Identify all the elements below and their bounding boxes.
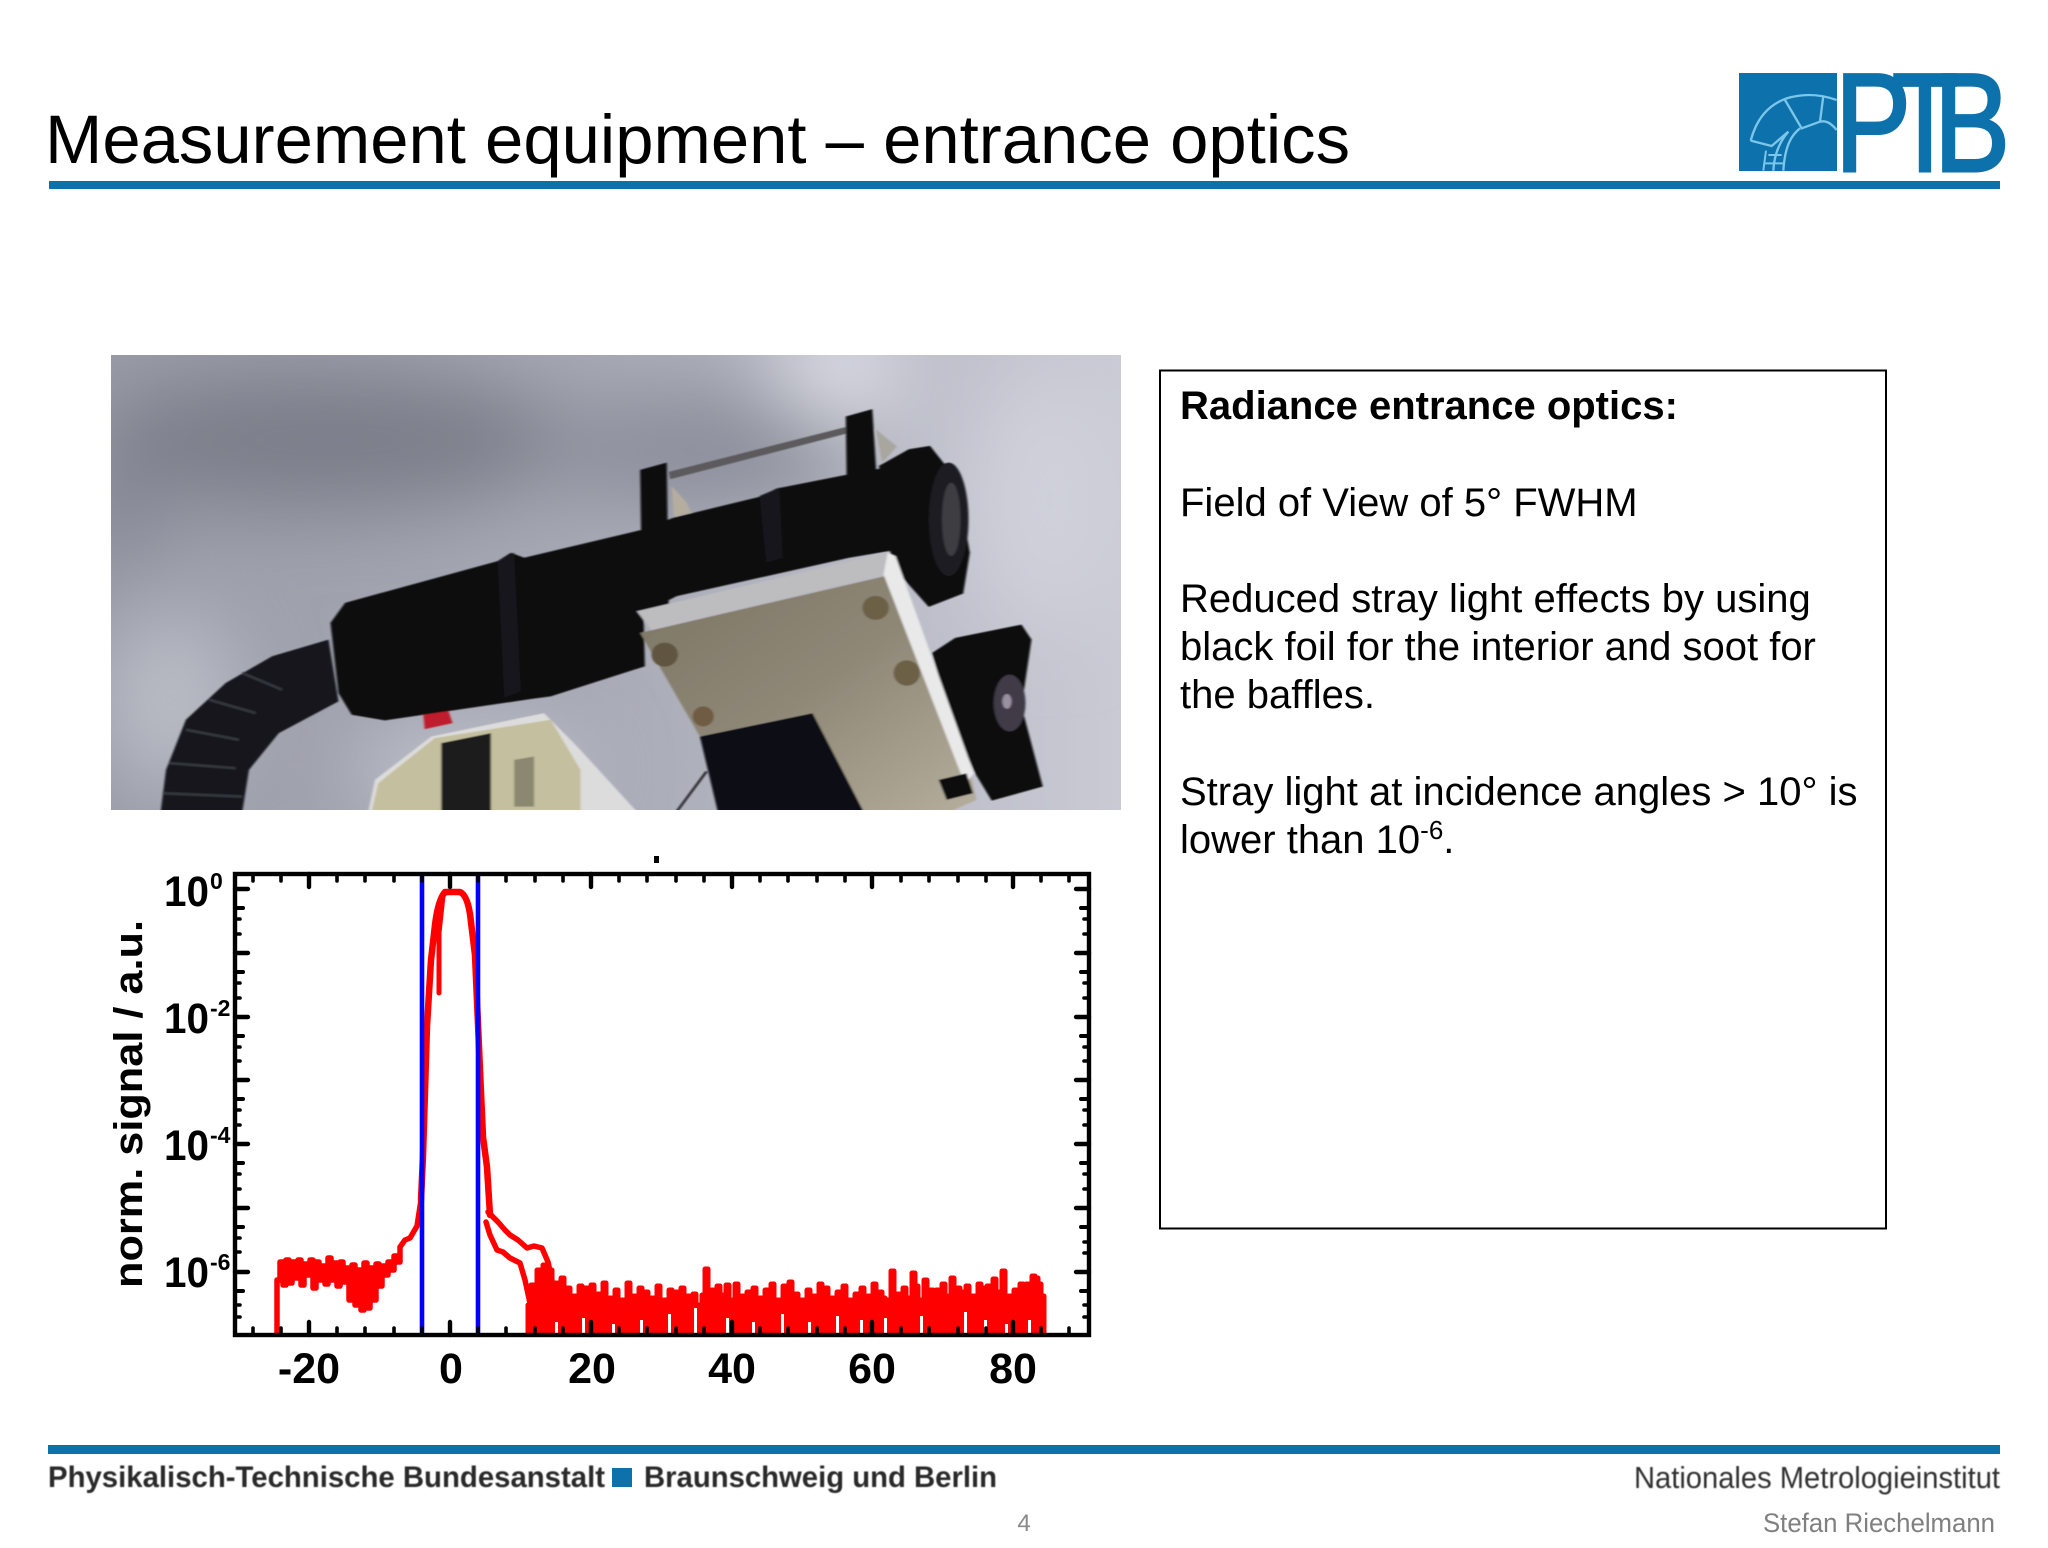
page number: 4 [1017,1510,1031,1537]
footer: institute name: Physikalisch-Technische Bundesanstalt [48,1461,605,1494]
panel: radiance entrance optics text box: Field of View of 5° FWHM [1180,481,1638,525]
x axis labels: 0 [439,1345,463,1393]
line chart: norm. signal vs angle [107,856,1089,1393]
panel: radiance entrance optics text box: lower than 10 [1180,818,1420,862]
footer: institute name: Braunschweig und Berlin [644,1461,997,1494]
blue field-of-view markers [422,873,478,1335]
logo: PTB: B [1934,44,2010,201]
header rule [49,181,2000,189]
footer: institute name [48,1461,997,1494]
rod and brackets [669,427,848,479]
panel: radiance entrance optics text box: Reduced stray light effects by using [1180,577,1811,621]
lower lens [932,625,1043,801]
y axis labels: 10 [164,868,209,916]
x axis labels: 20 [568,1345,616,1393]
logo: PTB [1739,44,2010,201]
white gaps in the noise floor [555,1308,1031,1336]
panel: radiance entrance optics text box: the baffles. [1180,673,1375,717]
y axis labels: 10 [164,1122,209,1170]
y axis labels: 10 [164,1249,209,1297]
mounting plate [640,574,976,812]
y axis labels: 0 [210,868,223,894]
red measurement curves [277,892,1044,1340]
barrel [330,468,899,720]
y axis labels: 10 [164,995,209,1043]
x axis labels [278,1345,1037,1393]
lens end [879,446,970,607]
logo: PTB: T [1892,44,1958,201]
footer rule [48,1445,2000,1454]
panel: radiance entrance optics text box [1160,370,1886,1228]
plot frame and ticks [235,874,1089,1335]
y axis labels [164,868,231,1297]
cable [161,640,338,812]
x axis labels: 60 [848,1345,896,1393]
panel: radiance entrance optics text box: Radiance entrance optics: [1180,384,1678,428]
panel: radiance entrance optics text box: . [1443,818,1454,862]
panel: radiance entrance optics text box: -6 [1420,815,1443,845]
y axis title: norm. signal / a.u. [107,920,151,1288]
y axis labels: -6 [210,1249,230,1275]
photo: radiance entrance optics on tracker [111,355,1121,810]
x axis labels: 80 [989,1345,1037,1393]
logo: PTB: P [1835,44,1911,201]
footer: national metrology institute: Nationales Metrologieinstitut [1634,1460,2000,1495]
y axis labels: -4 [210,1122,231,1148]
x axis labels: 40 [708,1345,756,1393]
y axis labels: -2 [210,995,230,1021]
motor housing [368,713,637,812]
x axis labels: -20 [278,1345,340,1393]
author: Stefan Riechelmann [1763,1508,1995,1538]
title: Measurement equipment – entrance optics [45,101,1350,178]
panel: radiance entrance optics text box: black foil for the interior and soot for [1180,625,1816,669]
panel: radiance entrance optics text box: Stray light at incidence angles > 10° is [1180,770,1858,814]
footer: blue square [612,1468,632,1487]
